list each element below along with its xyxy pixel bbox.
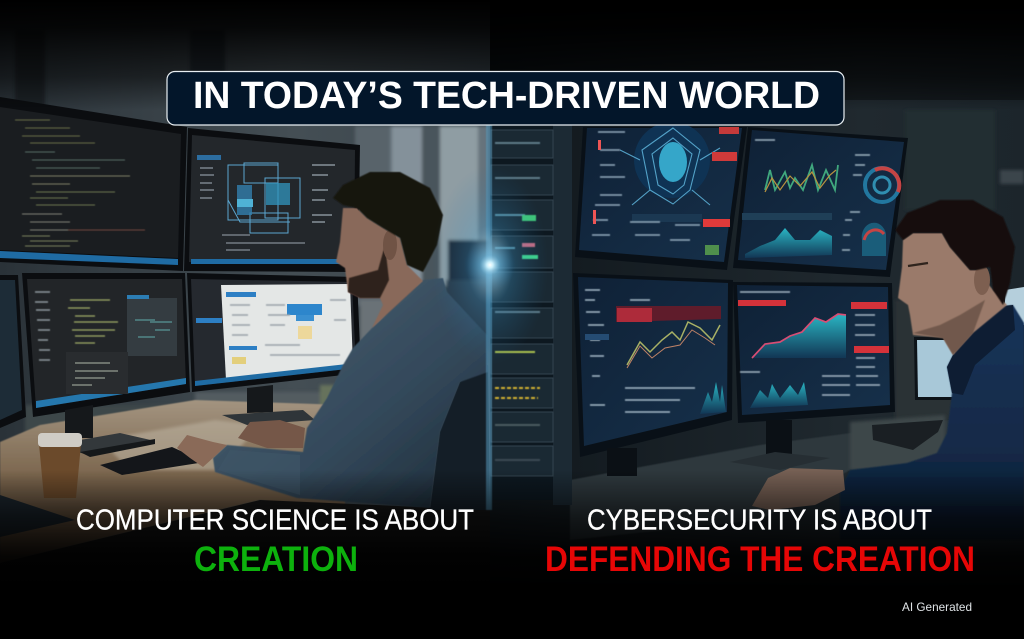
- hair: [895, 200, 1015, 305]
- monitor: code and panel bottom left: [22, 273, 190, 417]
- hands: [177, 435, 227, 467]
- phone: [80, 439, 155, 457]
- darker top right corner: [490, 0, 1024, 100]
- monitor: threat chart bottom right: [733, 282, 895, 423]
- monitor: shield radar top left: [575, 122, 747, 270]
- shirt: [213, 278, 488, 508]
- notebook: [0, 495, 75, 537]
- monitor: threat chart bottom left: [573, 273, 733, 457]
- beard: [348, 245, 389, 298]
- bottom fade: [0, 470, 1024, 590]
- ear: [383, 230, 397, 260]
- desk front shadow: [89, 500, 490, 550]
- AI generated note: AI Generated: [902, 600, 972, 614]
- monitor: far left partial: [0, 275, 26, 428]
- desk: [570, 434, 850, 533]
- title banner: IN TODAY’S TECH-DRIVEN WORLD: [193, 75, 820, 117]
- right caption: cybersecurity: CYBERSECURITY IS ABOUT: [587, 504, 932, 536]
- side screens: [914, 287, 1024, 400]
- coffee cup: [38, 433, 82, 498]
- monitor: code editor top left: [0, 97, 187, 271]
- desk: [0, 400, 346, 544]
- left caption: computer science: CREATION: [194, 540, 358, 579]
- monitor stands: [52, 385, 315, 456]
- monitor: diagram top right: [184, 128, 360, 272]
- analyst figure: [752, 200, 1024, 540]
- chair: [430, 365, 490, 510]
- neck and face: [898, 233, 1007, 355]
- top vignette: [0, 0, 1024, 110]
- server rack: [490, 95, 572, 505]
- right caption: cybersecurity: DEFENDING THE CREATION: [545, 540, 975, 579]
- light seam between panels: [432, 95, 548, 510]
- hands: [752, 468, 845, 510]
- panel: computer science developer scene: [0, 27, 490, 554]
- desk phone: [872, 420, 943, 450]
- ear: [974, 265, 990, 295]
- monitor: line chart top right: [733, 127, 908, 277]
- right caption: cybersecurity: [545, 504, 975, 579]
- brow: [908, 263, 928, 266]
- left caption: computer science: [76, 504, 474, 579]
- monitor stands: [607, 420, 830, 476]
- keyboard: [100, 447, 205, 475]
- left caption: computer science: COMPUTER SCIENCE IS ABOUT: [76, 504, 474, 536]
- panel: cybersecurity analyst scene: [490, 50, 1024, 546]
- developer figure: [177, 172, 488, 508]
- shirt: [840, 305, 1024, 540]
- hair: [333, 172, 443, 272]
- neck and face: [336, 208, 423, 328]
- monitor: light application window bottom right: [187, 273, 361, 392]
